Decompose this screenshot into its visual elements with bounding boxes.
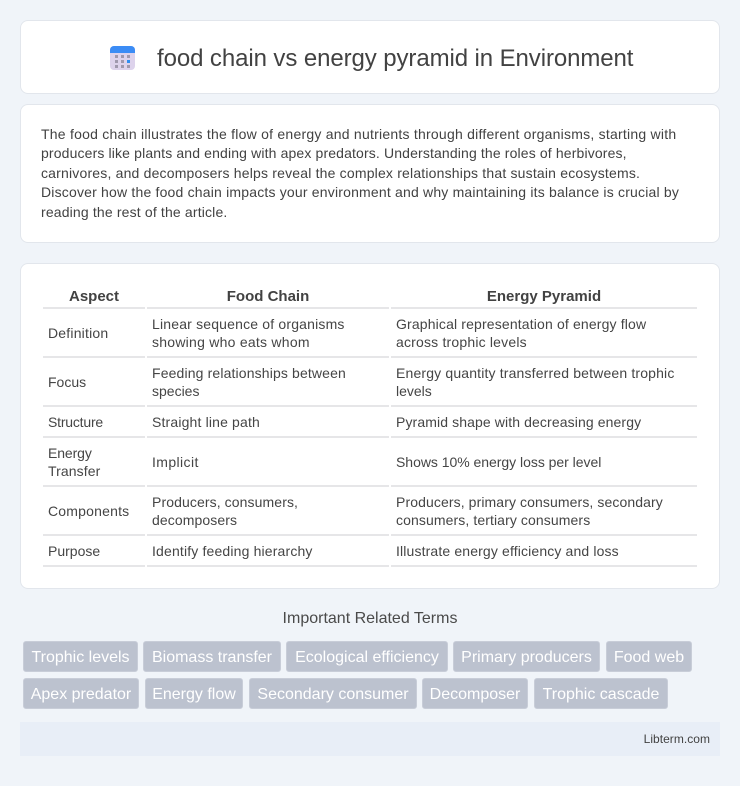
Focus energy pyramid — [396, 365, 674, 399]
related terms heading: Important Related Terms — [283, 610, 457, 627]
column heading: Aspect: Aspect — [69, 288, 119, 305]
title: food chain vs energy pyramid in Environment — [157, 45, 633, 72]
tag: Trophic levels: Trophic levels — [31, 649, 130, 666]
tag: Primary producers: Primary producers — [461, 649, 592, 666]
Components energy pyramid — [396, 494, 663, 528]
intro line 5: reading the rest of the article. — [41, 204, 227, 220]
tag: Energy flow — [145, 678, 243, 709]
Definition food chain — [152, 316, 345, 350]
intro line 4: Discover how the food chain impacts your environment and why maintaining its balance is crucial by — [41, 184, 679, 200]
Definition energy pyramid: across trophic levels — [396, 334, 527, 350]
intro line 3: carnivores, and decomposers helps reveal the complex relationships that sustain ecosystems. — [41, 165, 640, 181]
tag: Energy flow: Energy flow — [152, 686, 236, 703]
row: Energy Transfer — [48, 445, 100, 479]
row: Energy Transfer: Energy — [48, 445, 92, 461]
tag: Ecological efficiency — [286, 641, 448, 672]
column heading: Energy Pyramid: Energy Pyramid — [487, 288, 601, 305]
intro text panel — [20, 104, 720, 243]
tag: Biomass transfer: Biomass transfer — [152, 649, 272, 666]
tag: Apex predator — [23, 678, 139, 709]
row: Purpose: Purpose — [48, 543, 100, 559]
Components food chain: Producers, consumers, — [152, 494, 298, 510]
tag: Trophic cascade: Trophic cascade — [543, 686, 659, 703]
Definition food chain: showing who eats whom — [152, 334, 310, 350]
Definition energy pyramid: Graphical representation of energy flow — [396, 316, 646, 332]
row: Energy Transfer: Transfer — [48, 463, 100, 479]
Definition energy pyramid — [396, 316, 646, 350]
Purpose food chain: Identify feeding hierarchy — [152, 543, 313, 559]
column heading: Food Chain: Food Chain — [227, 288, 309, 305]
tag: Trophic cascade — [534, 678, 668, 709]
tag: Secondary consumer: Secondary consumer — [257, 686, 409, 703]
Purpose energy pyramid: Illustrate energy efficiency and loss — [396, 543, 619, 559]
tag: Ecological efficiency: Ecological efficiency — [295, 649, 439, 666]
intro line 2: producers like plants and ending with apex predators. Understanding the roles of herbivores, — [41, 145, 627, 161]
Focus energy pyramid: levels — [396, 383, 432, 399]
Energy Transfer food chain: Implicit — [152, 454, 199, 470]
header panel — [20, 20, 720, 94]
Focus energy pyramid: Energy quantity transferred between trophic — [396, 365, 674, 381]
tag: Trophic levels — [23, 641, 138, 672]
Components food chain — [152, 494, 298, 528]
comparison table panel — [20, 263, 720, 589]
Focus food chain — [152, 365, 346, 399]
icon: calendar — [110, 46, 135, 70]
Focus food chain: species — [152, 383, 199, 399]
tag: Primary producers — [453, 641, 600, 672]
tag: Secondary consumer — [249, 678, 417, 709]
footer bar — [20, 722, 720, 756]
intro line 1: The food chain illustrates the flow of energy and nutrients through different organisms, starting with — [41, 126, 676, 142]
tag: Decomposer — [422, 678, 528, 709]
Components food chain: decomposers — [152, 512, 237, 528]
Focus food chain: Feeding relationships between — [152, 365, 346, 381]
row: Structure: Structure — [48, 414, 103, 430]
Structure food chain: Straight line path — [152, 414, 260, 430]
row: Focus: Focus — [48, 374, 86, 390]
Components energy pyramid: Producers, primary consumers, secondary — [396, 494, 663, 510]
Energy Transfer energy pyramid: Shows 10% energy loss per level — [396, 454, 601, 470]
tag: Decomposer: Decomposer — [430, 686, 520, 703]
Definition food chain: Linear sequence of organisms — [152, 316, 345, 332]
tag: Food web — [606, 641, 692, 672]
footer credit: Libterm.com — [644, 732, 710, 746]
row: Components: Components — [48, 503, 129, 519]
tag: Food web: Food web — [614, 649, 684, 666]
tag: Biomass transfer — [143, 641, 281, 672]
Components energy pyramid: consumers, tertiary consumers — [396, 512, 590, 528]
row: Definition: Definition — [48, 325, 108, 341]
tag: Apex predator: Apex predator — [31, 686, 131, 703]
Structure energy pyramid: Pyramid shape with decreasing energy — [396, 414, 641, 430]
